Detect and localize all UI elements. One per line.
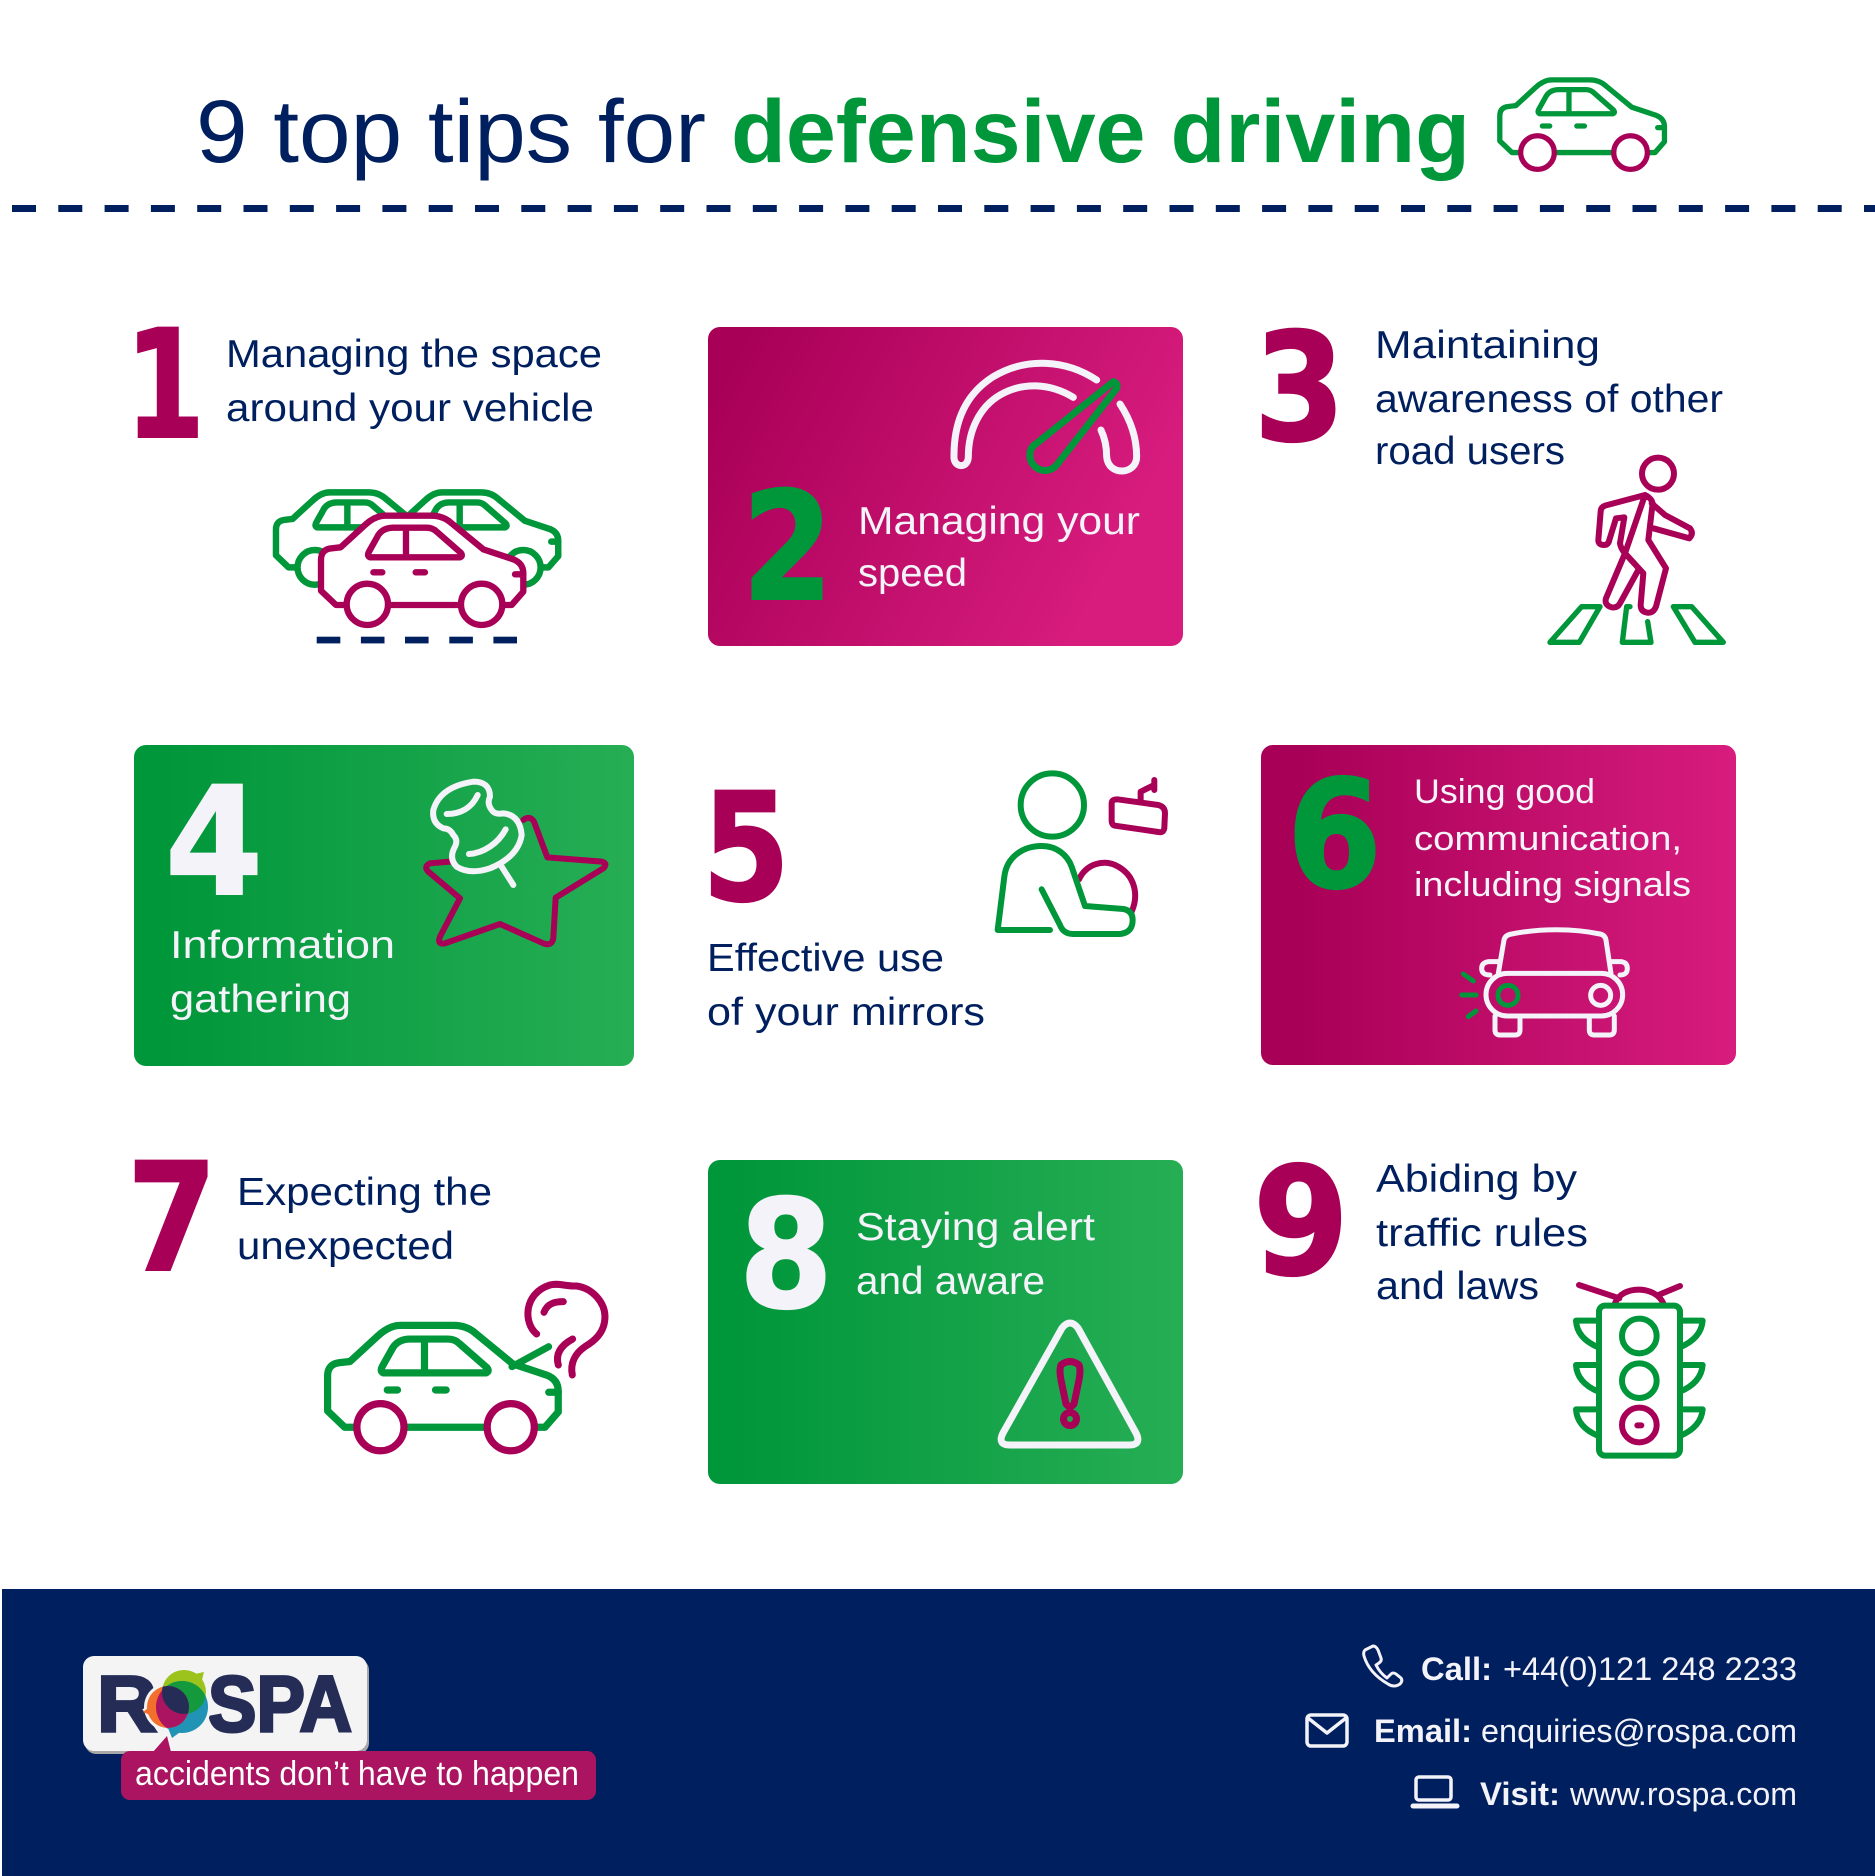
- card background: [1261, 745, 1736, 1065]
- logo: RoSPA: [83, 1656, 596, 1800]
- number 5: 5: [702, 762, 790, 936]
- icon: speedometer: [954, 363, 1137, 471]
- number 6: 6: [1287, 749, 1382, 923]
- contact: visit: Visit:: [1480, 1776, 1560, 1812]
- panel: tip 1: [125, 299, 602, 643]
- icon: traffic light: [1576, 1285, 1703, 1456]
- logo wordmark: R: [97, 1659, 157, 1748]
- road dashes: [317, 637, 517, 643]
- text: tip 2: Managing your: [858, 500, 1140, 543]
- icon: pedestrian on crossing: [1550, 458, 1723, 642]
- panel: tip 6: [1261, 745, 1736, 1065]
- text: tip 2: speed: [858, 552, 967, 595]
- contact: visit: www.rospa.com: [1569, 1776, 1797, 1812]
- text: tip 9: [1376, 1158, 1588, 1308]
- text: tip 8: [856, 1206, 1095, 1303]
- title: [196, 81, 1470, 181]
- text: tip 5: of your mirrors: [707, 991, 985, 1034]
- contact: call: +44(0)121 248 2233: [1503, 1651, 1797, 1687]
- icon: title car: [1500, 80, 1664, 169]
- card background: [708, 1160, 1183, 1484]
- panel: tip 4: [134, 745, 634, 1066]
- icon: driver and mirror: [998, 773, 1165, 934]
- logo wordmark: SPA: [208, 1659, 352, 1748]
- icon: phone: [1364, 1646, 1402, 1686]
- text: tip 1: [226, 333, 602, 430]
- number 8: 8: [739, 1169, 833, 1343]
- text: tip 8: Staying alert: [856, 1206, 1095, 1249]
- text: tip 1: Managing the space: [226, 333, 602, 376]
- logo box: [83, 1656, 369, 1754]
- icon: pin and star: [426, 782, 605, 944]
- icon: smoking car: [328, 1284, 605, 1451]
- panel: tip 9: [1253, 1136, 1703, 1456]
- contact: call: Call:: [1421, 1651, 1492, 1687]
- footer band: [2, 1589, 1875, 1876]
- text: tip 6: [1414, 773, 1691, 904]
- icon: laptop: [1413, 1777, 1457, 1806]
- card background: [708, 327, 1183, 646]
- text: tip 5: Effective use: [707, 937, 944, 980]
- text: tip 4: [170, 924, 395, 1021]
- text: tip 7: unexpected: [237, 1225, 454, 1268]
- title: defensive driving: [731, 81, 1470, 181]
- number 4: 4: [165, 756, 263, 930]
- logo bubbles: [143, 1667, 211, 1738]
- text: tip 9: Abiding by: [1376, 1158, 1578, 1201]
- number 1: 1: [125, 299, 205, 473]
- text: tip 6: Using good: [1414, 773, 1595, 811]
- panel: tip 7: [127, 1132, 605, 1451]
- number 2: 2: [742, 461, 833, 635]
- text: tip 9: traffic rules: [1376, 1212, 1588, 1255]
- card background: [134, 745, 634, 1066]
- text: tip 8: and aware: [856, 1260, 1045, 1303]
- icon: envelope: [1307, 1715, 1347, 1746]
- panel: tip 2: [708, 327, 1183, 646]
- logo wordmark: [97, 1659, 352, 1748]
- tagline bar: accidents don’t have to happen: [135, 1755, 579, 1793]
- icon: three cars: [276, 492, 558, 625]
- text: tip 3: Maintaining: [1375, 324, 1600, 367]
- text: tip 3: [1375, 324, 1723, 473]
- tagline bar: [121, 1736, 596, 1800]
- title: 9 top tips for: [196, 81, 706, 181]
- text: tip 2: [858, 500, 1140, 595]
- text: tip 3: awareness of other: [1375, 378, 1723, 421]
- icon: car front with signal: [1462, 930, 1627, 1035]
- text: tip 6: including signals: [1414, 866, 1691, 904]
- text: tip 7: Expecting the: [237, 1171, 492, 1214]
- number 3: 3: [1254, 302, 1345, 476]
- text: tip 1: around your vehicle: [226, 387, 594, 430]
- text: tip 5: [707, 937, 985, 1034]
- panel: tip 5: [702, 762, 1165, 1034]
- icon: warning triangle: [1001, 1323, 1138, 1445]
- number 9: 9: [1253, 1136, 1349, 1310]
- contact: email: Email:: [1374, 1713, 1472, 1749]
- panel: tip 3: [1254, 302, 1723, 642]
- text: tip 4: Information: [170, 924, 395, 967]
- text: tip 4: gathering: [170, 978, 351, 1021]
- text: tip 3: road users: [1375, 430, 1565, 473]
- contact: email: enquiries@rospa.com: [1481, 1713, 1797, 1749]
- text: tip 9: and laws: [1376, 1265, 1539, 1308]
- text: tip 6: communication,: [1414, 820, 1682, 858]
- number 7: 7: [127, 1132, 217, 1306]
- text: tip 7: [237, 1171, 492, 1268]
- panel: tip 8: [708, 1160, 1183, 1484]
